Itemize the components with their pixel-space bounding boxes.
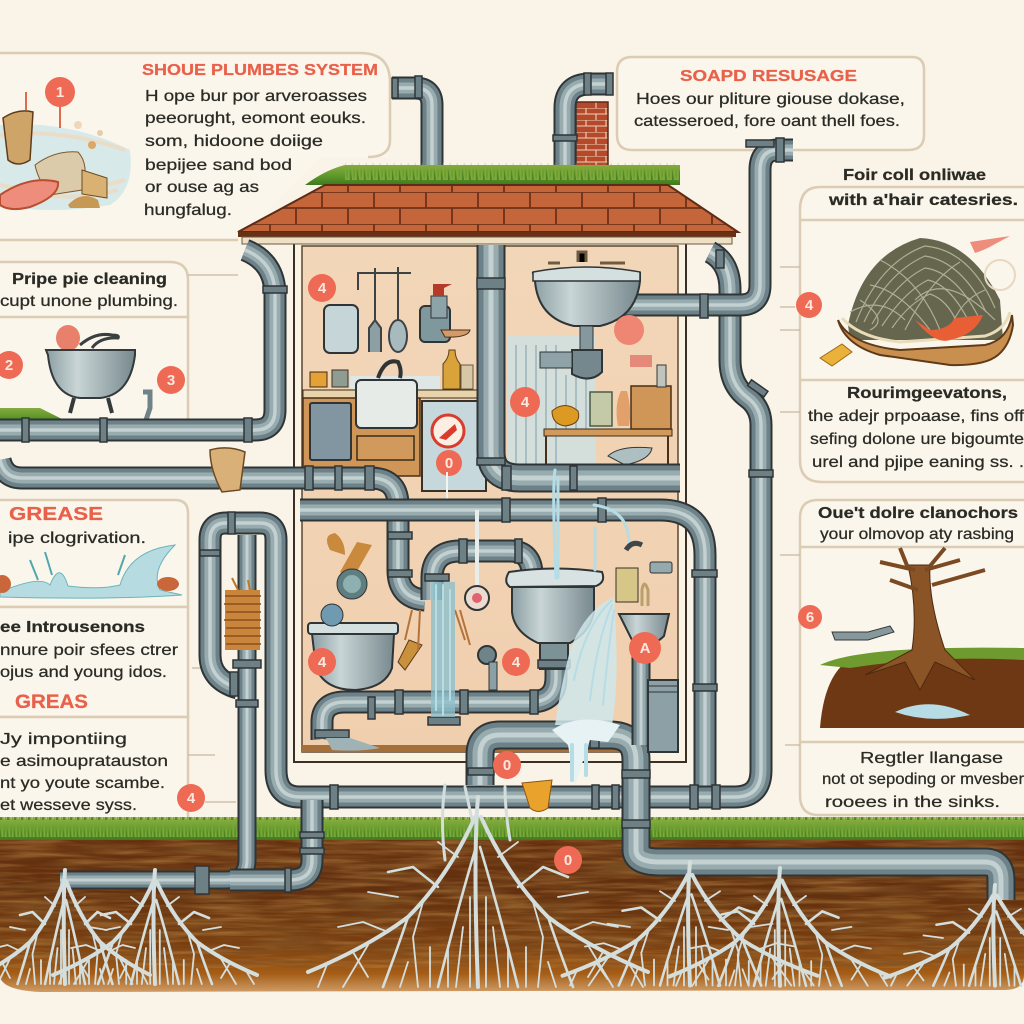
panel: soapd resusage xyxy=(617,57,924,150)
panel: grease pipe clogging xyxy=(0,500,188,607)
heading: SHOUE PLUMBES SYSTEM xyxy=(142,62,378,79)
pipe: roof vent centre xyxy=(565,84,612,168)
icon: dispenser xyxy=(420,284,470,342)
badge A: A xyxy=(640,640,651,657)
badge 4: 4 xyxy=(512,654,521,671)
icon: utensils xyxy=(358,267,411,352)
pipe: lower drain xyxy=(322,650,556,740)
gauge and valve xyxy=(465,510,497,690)
pipe: gooseneck xyxy=(432,551,532,600)
water stream centre xyxy=(431,582,455,717)
panel: hair clog: with a'hair catesries. xyxy=(828,192,1018,209)
panel: importance: e asimoupratauston xyxy=(0,753,168,770)
pipe: vent right xyxy=(606,150,793,305)
icon: food waste in water xyxy=(0,92,131,210)
badge 4: 4 xyxy=(805,297,814,314)
icon: bathtub xyxy=(46,325,150,420)
sink upper xyxy=(533,252,644,379)
panel: hair clog xyxy=(796,167,1024,482)
heading: GREASE xyxy=(9,504,103,524)
badge 4 xyxy=(502,648,530,676)
body text: hungfalug. xyxy=(144,202,232,219)
large sink xyxy=(506,568,603,669)
panel: intrusions xyxy=(0,607,188,717)
body text: Rourimgeevatons, xyxy=(847,385,1007,402)
heading: Pripe pie cleaning xyxy=(12,271,167,288)
badge 4: 4 xyxy=(521,394,530,411)
badge 4 xyxy=(510,387,540,417)
icon: leaking water column behind stack xyxy=(508,335,596,470)
house: interior walls xyxy=(294,240,686,762)
heading: Oue't dolre clanochors xyxy=(818,505,1018,522)
icon: tree with roots xyxy=(820,548,1024,728)
badge 0 xyxy=(493,751,521,779)
body text: bepijee sand bod xyxy=(145,157,292,174)
badge 0: 0 xyxy=(445,455,453,472)
badge 3: 3 xyxy=(167,372,175,389)
panel: importance: Jy impontiing xyxy=(0,731,127,748)
icon: hair in basket xyxy=(820,236,1015,366)
house: roof grass xyxy=(305,160,680,185)
badge 0: 0 xyxy=(503,757,511,774)
badge 4 xyxy=(796,292,822,318)
panel: shower plumbing system intro xyxy=(0,53,390,240)
icon: counter items xyxy=(310,372,327,387)
house: roof xyxy=(238,185,738,244)
panel: intrusions: ojus and young idos. xyxy=(0,664,167,681)
body text xyxy=(144,88,367,219)
panel: tree roots xyxy=(798,500,1024,815)
panel: importance xyxy=(0,717,188,822)
badge 6 xyxy=(798,605,822,629)
falling water into sink xyxy=(554,470,629,578)
pipe: small sink drain xyxy=(640,640,642,745)
badge 0 xyxy=(554,846,582,874)
toilet left xyxy=(308,604,398,751)
pipe: roof vent left xyxy=(392,88,432,170)
icon: orange clamp xyxy=(522,780,552,812)
body text: Regtler llangase xyxy=(860,750,1003,767)
icon: wall unit xyxy=(324,305,358,353)
caption: your olmovop aty rasbing xyxy=(820,526,1014,543)
leader lines xyxy=(188,267,800,802)
badge 1: 1 xyxy=(56,84,64,101)
roots: left fans xyxy=(0,870,257,984)
panel: intrusions: ee Introusenons xyxy=(0,619,145,636)
body text: som, hidoone doiige xyxy=(145,133,323,150)
roots: central fan xyxy=(308,797,648,987)
icon: water splash xyxy=(0,545,182,598)
pipe couplings xyxy=(22,73,784,894)
heading: GREAS xyxy=(15,692,88,713)
heading: SOAPD RESUSAGE xyxy=(680,68,857,85)
water on central pipe xyxy=(442,785,510,860)
badge 2: 2 xyxy=(5,357,13,374)
caption: cupt unone plumbing. xyxy=(0,293,178,310)
pipe: gutter left xyxy=(0,250,275,430)
body text: the adejr prpoaase, fins off xyxy=(808,408,1024,425)
house: chimney xyxy=(576,102,608,170)
body text: Hoes our pliture giouse dokase, xyxy=(636,91,905,108)
badge 4: 4 xyxy=(318,280,327,297)
body text: H ope bur por arveroasses xyxy=(145,88,367,105)
pipe: mid horizontal xyxy=(0,460,425,600)
badge 2 xyxy=(0,351,23,379)
roots: right fans xyxy=(562,862,1024,986)
heading: Foir coll onliwae xyxy=(843,167,986,184)
panel: intrusions: nnure poir sfees ctrer xyxy=(0,642,179,659)
pipe: lower left return xyxy=(230,800,312,880)
badge 4 xyxy=(177,784,205,812)
badge 3 xyxy=(157,366,185,394)
badge 1 xyxy=(45,77,75,107)
caption: ipe clogrivation. xyxy=(8,530,146,547)
badge 4: 4 xyxy=(318,654,327,671)
body text: urel and pjipe eaning ss. . xyxy=(812,454,1024,471)
badge 0: 0 xyxy=(564,852,572,869)
pipe: arch and underground xyxy=(480,735,1001,900)
badge 4: 4 xyxy=(187,790,196,807)
small faucet and basin right xyxy=(616,543,678,752)
badge 6: 6 xyxy=(806,609,814,626)
body text: or ouse ag as xyxy=(145,179,259,196)
water cascade leak xyxy=(552,597,620,785)
body text xyxy=(822,750,1024,811)
ground: grass xyxy=(0,817,1024,840)
body text xyxy=(808,385,1024,471)
shelf unit right xyxy=(544,355,672,487)
pipe: long horizontal xyxy=(300,510,705,795)
pipe: centre stack xyxy=(491,245,680,478)
pipe: drop left xyxy=(60,535,247,880)
icon: no-grease sign xyxy=(432,415,464,447)
ground: soil xyxy=(0,838,1024,992)
panel: importance: nt yo youte scambe. xyxy=(0,775,165,792)
kitchen upper items xyxy=(310,267,473,389)
pipe: main loop xyxy=(210,252,761,797)
body text: catesseroed, fore oant thell foes. xyxy=(634,113,900,130)
panel: pipe cleaning xyxy=(0,262,188,420)
panel: importance: et wesseve syss. xyxy=(0,797,137,814)
body text: peeorught, eomont eouks. xyxy=(145,110,366,127)
left grass strip xyxy=(0,408,72,424)
clog debris left xyxy=(210,448,470,670)
badge A xyxy=(629,632,661,664)
body text: sefing dolone ure bigoumte xyxy=(810,431,1024,448)
body text xyxy=(634,91,905,130)
badge 4 xyxy=(308,648,336,676)
icon: pipe brush xyxy=(224,578,261,668)
badge 0 xyxy=(436,450,462,476)
badge 4 xyxy=(308,274,336,302)
body text: not ot sepoding or mvesber xyxy=(822,771,1024,788)
cabinet xyxy=(303,380,488,502)
body text: rooees in the sinks. xyxy=(825,794,1000,811)
